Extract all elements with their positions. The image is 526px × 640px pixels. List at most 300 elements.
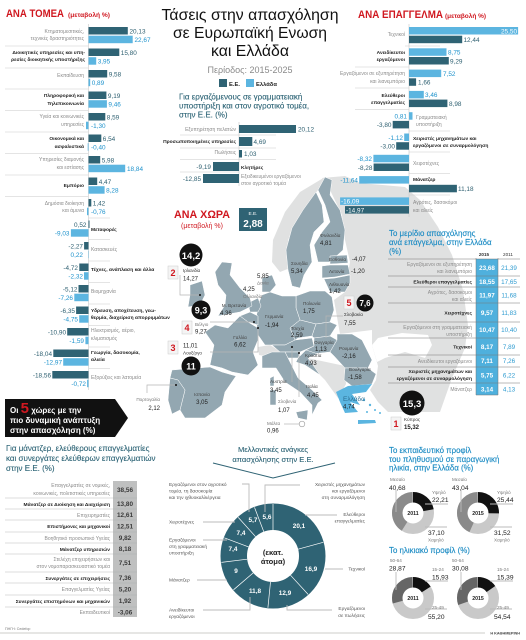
table values: 5,75 — [481, 372, 494, 380]
legend: Ελλάδα — [256, 82, 277, 88]
table values: 11,68 — [501, 292, 517, 300]
country labels: Πορτογαλία — [136, 397, 160, 402]
sector labels: και εστίασης — [57, 165, 85, 171]
country labels: 9,27 — [195, 330, 207, 336]
occupation values: -16,09 — [341, 199, 360, 206]
table values: 7,26 — [503, 358, 516, 365]
occupation labels: Ελεύθεροι — [382, 93, 406, 99]
heading: by occupation: ΑΝΑ ΕΠΑΓΓΕΛΜΑ — [358, 9, 443, 21]
sector values: 22,67 — [134, 37, 151, 44]
donut centre text — [261, 548, 286, 566]
sector labels: Οικονομικά και — [49, 136, 85, 142]
occupation labels: επαγγελματίες — [371, 100, 405, 106]
heading: by country: (μεταβολή %) — [181, 223, 223, 230]
age labels: 15,39 — [497, 574, 514, 582]
donut 2011 education — [397, 497, 429, 529]
heading: by country: ΑΝΑ ΧΩΡΑ — [174, 209, 230, 221]
country labels: Ελλάδα — [343, 395, 365, 403]
country labels: 15,32 — [404, 425, 420, 431]
country labels: 11,01 — [183, 344, 198, 350]
donut labels: Τεχνικοί — [348, 566, 366, 572]
labels: Επιχειρηματίες — [77, 513, 111, 519]
education labels: 40,68 — [389, 485, 406, 492]
country labels: Δανία — [257, 280, 269, 286]
country labels: Σουηδία — [291, 261, 308, 266]
donut 2015 age — [462, 582, 494, 614]
sector values: 4,47 — [99, 179, 112, 186]
bars — [180, 122, 296, 186]
education labels: 43,04 — [452, 485, 469, 492]
country labels: Βουλγαρία — [349, 367, 371, 372]
sector values: -18,56 — [33, 372, 51, 380]
Greece highlighted — [336, 384, 381, 424]
donut labels: Εργαζόμενοι στον αγροτικό — [169, 481, 227, 488]
heading: Το μερίδιο απασχόλησης — [389, 229, 476, 238]
values: 1,92 — [119, 598, 132, 605]
sector values — [33, 28, 151, 388]
gray column — [113, 481, 137, 617]
occupation values: -1,12 — [388, 135, 403, 142]
age labels: 2011 — [407, 596, 419, 602]
occupation labels: Εργαζόμενοι σε εξυπηρέτηση — [340, 70, 405, 77]
country labels: -4,07 — [352, 257, 366, 263]
country labels: Γαλλία — [233, 335, 247, 340]
values: -3,06 — [118, 610, 133, 616]
values and labels: Προσωποποιημένες υπηρεσίες — [163, 139, 236, 145]
country labels: Ιταλία — [306, 384, 318, 389]
sector labels: θερμία, διαχείριση απορριμμάτων — [91, 315, 170, 321]
donut labels: τομέα, τη δασοκομία — [169, 488, 213, 494]
age labels: 15-24 — [432, 567, 444, 572]
country labels: Λιθουανία — [329, 282, 350, 287]
country labels: Εσθονία — [329, 257, 346, 262]
sector values: 0,52 — [74, 222, 87, 229]
country labels: Κύπρος — [404, 416, 421, 422]
age labels: 25-49 — [497, 605, 509, 610]
occupation labels: Μάνατζερ — [413, 177, 435, 183]
values and labels: στον αγροτικό τομέα — [241, 180, 286, 187]
country labels: 1,13 — [315, 347, 327, 353]
table labels: Εργαζόμενοι στη γραμματειακή — [403, 324, 472, 331]
top-five circles: 15,3 — [403, 399, 421, 410]
country labels: Λετονία — [329, 269, 345, 274]
donut labels: στη γραμματειακή — [169, 543, 207, 550]
occupation labels: υποστήριξη — [416, 121, 442, 128]
table values: 10,40 — [501, 327, 517, 334]
heading: υποστήριξη και στον αγροτικό τομέα, — [179, 102, 309, 110]
rank badges — [168, 266, 401, 430]
sector values: 8,59 — [107, 114, 120, 122]
panel: age profile — [389, 546, 514, 621]
heading: ανά επάγγελμα, στην Ελλάδα — [389, 238, 492, 247]
sector values: 20,13 — [130, 28, 146, 36]
table values: 6,22 — [503, 372, 516, 380]
country labels: Μάλτα — [267, 420, 281, 426]
country labels: Λουξ/ργο — [183, 350, 202, 356]
sector labels: Υπηρεσίες διαμονής — [39, 156, 85, 163]
sector labels: Κτηματομεσιτικές, — [45, 28, 84, 35]
sector labels: Γεωργία, δασοκομία, — [91, 350, 140, 356]
sector labels: Τέχνες, ανάπλαση και άλλα — [91, 267, 154, 273]
occupation values: 12,44 — [464, 37, 480, 44]
table labels: Αγρότες, δασοκόμοι — [428, 289, 472, 296]
sector labels: Κατασκευές — [91, 246, 118, 253]
table labels: Εργαζόμενοι σε εξυπηρέτηση — [407, 261, 472, 268]
education labels: 31,52 — [494, 530, 511, 537]
year header: 2011 — [503, 252, 513, 257]
sector values: -18,04 — [34, 351, 52, 358]
age labels: 50-64 — [390, 558, 402, 563]
country labels: Μ. Βρετανία — [222, 303, 247, 308]
donut labels: Εργαζόμενοι — [169, 536, 196, 544]
sector labels: Εμπόριο — [64, 183, 84, 189]
heading: του πληθυσμού σε παραγωγική — [389, 455, 499, 464]
heading: by sector: ΑΝΑ ΤΟΜΕΑ — [6, 8, 64, 20]
sector values: -0,72 — [71, 381, 86, 388]
top-five circles: 11 — [186, 362, 196, 372]
occupation labels: Χειριστές μηχανημάτων και — [413, 136, 477, 142]
country labels: Γερμανία — [265, 314, 284, 319]
education labels — [389, 477, 514, 542]
table values — [479, 265, 517, 394]
occupation values: 11,18 — [458, 186, 474, 193]
labels: Μάνατζερ σε Διοίκηση και Διαχείριση — [24, 502, 110, 508]
heading note: (μεταβολή %) — [68, 12, 110, 19]
occupation values — [340, 28, 517, 214]
donut chart — [221, 504, 323, 608]
country labels — [136, 233, 421, 434]
labels — [16, 482, 111, 616]
labels: κοινωνικές, πολιτιστικές υπηρεσίες — [33, 490, 111, 497]
donut chart: 7,4 — [229, 546, 238, 553]
sector labels: τεχνικές δραστηριότητες — [31, 35, 85, 42]
table values: 17,65 — [501, 279, 517, 286]
sector labels: υπηρεσίες — [61, 122, 85, 128]
rank badges: 3 — [170, 343, 176, 353]
map of Europe — [168, 176, 468, 424]
sector values: -0,40 — [91, 145, 106, 152]
country labels: 1,42 — [329, 289, 341, 295]
occupation values: 8,75 — [448, 50, 461, 57]
country labels: -2,16 — [342, 354, 356, 360]
footer: ΠΗΓΗ: Cedefop — [5, 627, 30, 631]
occupation values: 8,98 — [449, 101, 462, 108]
country labels: 14,27 — [183, 276, 199, 282]
occupation values: -3,80 — [377, 122, 392, 129]
sector values: -9,03 — [55, 231, 70, 238]
table labels: υποστήριξη — [446, 331, 472, 338]
values: 5,20 — [119, 586, 132, 594]
sector values: 8,28 — [106, 188, 119, 195]
sector labels: Εκπαίδευση — [57, 73, 84, 79]
rank badges: 1 — [393, 419, 399, 429]
country labels: -1,58 — [348, 375, 362, 381]
donut chart: 5,6 — [263, 514, 272, 521]
sector labels: και άμυνα — [62, 207, 84, 214]
title: Τάσεις στην απασχόληση — [162, 7, 338, 24]
education labels: 37,10 — [428, 530, 445, 537]
country labels: 4,74 — [343, 404, 355, 410]
values: 38,56 — [117, 487, 133, 494]
country labels: Πολωνία — [303, 301, 321, 306]
donut labels — [169, 481, 366, 620]
sector labels: Εξορύξεις και λατομεία — [91, 374, 141, 381]
country labels: Κροατία — [305, 353, 322, 358]
table values: 9,57 — [481, 310, 494, 317]
donut labels: εργαζόμενοι — [169, 613, 195, 620]
sector values: -4,75 — [63, 317, 78, 324]
panel: clerical and agricultural workers — [163, 92, 314, 187]
sector values: 15,80 — [121, 50, 137, 57]
country labels: Σλοβενία — [278, 399, 297, 404]
occupation values: 1,66 — [418, 80, 431, 87]
donut labels: στη συναρμολόγηση — [322, 494, 365, 501]
heading: και συνεργάτες ελεύθερων επαγγελματιών — [6, 454, 156, 463]
values and labels: Εξυπηρέτηση πελατών — [185, 126, 236, 133]
donut labels: Χειριστές μηχανημάτων — [315, 481, 366, 488]
labels: Συνεργάτες επιστημόνων και μηχανικών — [16, 599, 110, 605]
education labels: Μεσαίο — [452, 477, 467, 482]
donut chart: 12,9 — [279, 590, 292, 597]
age labels: 15-24 — [497, 567, 509, 572]
sector values: -5,12 — [63, 286, 78, 294]
heading note: (μεταβολή %) — [445, 13, 486, 20]
legend — [219, 79, 277, 88]
values: 12,61 — [117, 512, 133, 519]
panel: future employment needs donut — [169, 445, 366, 620]
table values: 7,89 — [503, 344, 516, 351]
sector values: 6,54 — [103, 136, 116, 143]
non-EU land — [258, 176, 468, 412]
country labels: Φινλανδία — [320, 233, 341, 238]
country labels: 6,62 — [234, 342, 246, 348]
sector values: 9,19 — [108, 93, 121, 100]
heading: στην Ε.Ε. (%) — [6, 464, 55, 473]
top-five circles: 7,6 — [359, 299, 371, 308]
sector labels: Διοικητικές υπηρεσίες και υπη- — [12, 50, 85, 56]
callout: top five countries: πιο δυναμική ανάπτυξη — [10, 416, 100, 425]
occupation values: -14,97 — [346, 207, 365, 214]
donut chart: 9 — [234, 568, 238, 575]
education labels: 2015 — [472, 511, 484, 517]
sector labels: Υγεία και κοινωνικές — [39, 113, 85, 120]
occupation values: -8,32 — [357, 156, 372, 163]
labels: στον νομοπαρασκευαστικό τομέα — [37, 563, 110, 570]
country labels: 5,34 — [291, 269, 303, 275]
donut chart: 16,9 — [305, 566, 318, 573]
panel: managers and professionals table — [5, 444, 156, 617]
donut labels: και εργαζόμενοι — [332, 488, 365, 494]
country labels: 2,12 — [148, 406, 161, 412]
donut labels: Ελεύθεροι — [343, 511, 365, 518]
labels: Βοηθητικό προσωπικό Υγείας — [45, 535, 111, 542]
donut leaders — [197, 484, 343, 610]
panel: by sector — [5, 8, 170, 390]
sector labels: Πληροφορική και — [44, 93, 85, 99]
education labels: Μεσαίο — [390, 477, 405, 482]
labels: Επαγγελματίες σε νομικές, — [51, 482, 110, 489]
donut labels: υποστήριξη — [169, 550, 194, 556]
sector values: -2,27 — [68, 244, 83, 250]
table labels: Τεχνικοί — [453, 344, 473, 350]
panel: share by occupation table — [388, 229, 520, 395]
sector bars — [52, 27, 133, 387]
table values: 10,47 — [479, 327, 495, 334]
top-five circles: 14,2 — [182, 251, 200, 262]
sector labels: αλιεία — [91, 357, 105, 363]
occupation labels: Αγρότες, δασοκόμοι — [413, 199, 457, 206]
country labels: 3,45 — [270, 388, 282, 394]
occupation labels: Ανειδίκευτοι — [377, 50, 406, 56]
table labels: εργαζόμενοι σε συναρμολόγηση — [397, 376, 472, 382]
donut labels: Εργαζόμενοι — [338, 605, 365, 612]
education labels: 25,44 — [497, 497, 514, 504]
table labels: και λιανεμπόριο — [437, 268, 472, 275]
table values: 3,14 — [481, 386, 494, 394]
donut chart: 20,1 — [293, 523, 306, 530]
donut 2015 education — [462, 497, 494, 529]
Malta marker — [299, 421, 305, 427]
period subtitle: Περίοδος: 2015-2025 — [208, 65, 292, 75]
education labels: Υψηλό — [497, 489, 511, 495]
heading: απασχόλησης στην Ε.Ε. — [232, 455, 314, 464]
occupation labels: εργαζόμενοι σε συναρμολόγηση — [413, 143, 488, 149]
values: 7,51 — [119, 560, 132, 567]
top-five circles: 9,3 — [195, 306, 207, 316]
age labels: 54,54 — [494, 614, 511, 621]
labels: Εκπαιδευτικοί — [80, 610, 111, 616]
values and labels: Κλητήρες — [241, 165, 264, 171]
heading: Μελλοντικές ανάγκες — [238, 445, 308, 454]
donut labels: και την ιχθυοκαλλιέργεια — [169, 494, 221, 501]
donut chart: 7,4 — [237, 530, 246, 537]
occupation values: 3,46 — [425, 92, 438, 99]
year header: 2015 — [479, 252, 490, 257]
donut centre text: (εκατ. — [263, 548, 283, 557]
age labels: 50-64 — [452, 558, 464, 563]
donut 2011 age — [397, 582, 429, 614]
EU total box — [239, 208, 267, 231]
education labels: 22,21 — [432, 497, 449, 504]
occupation values: -8,28 — [358, 165, 373, 172]
country labels: 7,55 — [344, 321, 356, 327]
country labels: Ισπανία — [194, 392, 210, 397]
heading: στην Ε.Ε. (%) — [179, 110, 228, 120]
age labels: 25-49 — [432, 605, 444, 610]
education labels: Υψηλό — [432, 489, 446, 495]
donut labels: Χειροτέχνες — [169, 518, 195, 526]
sector values: 3,95 — [98, 59, 111, 66]
chevron — [213, 463, 335, 478]
values and labels: Εξειδικευμένοι εργαζόμενοι — [241, 173, 301, 180]
country labels: Τσεχία — [291, 326, 305, 331]
country labels: Ρουμανία — [339, 346, 359, 351]
occupation bars — [340, 27, 518, 214]
title: και Ελλάδα — [211, 43, 289, 60]
donut labels: Ανειδίκευτοι — [169, 608, 194, 614]
heading: by country — [174, 209, 230, 230]
leader lines — [396, 490, 513, 527]
values and labels: 20,12 — [298, 126, 314, 134]
values and labels: -12,85 — [183, 176, 201, 183]
sector labels: Δημόσια διοίκηση — [45, 200, 84, 207]
education labels: Χαμηλό — [494, 536, 510, 542]
table labels: Χειροτέχνες — [444, 310, 472, 316]
sector values: 0,22 — [71, 252, 83, 259]
education labels: Χαμηλό — [428, 536, 444, 542]
country labels: -1,20 — [351, 269, 365, 275]
footer: Η ΚΑΘΗΜΕΡΙΝΗ — [490, 632, 520, 636]
sector labels: κλιματισμός — [91, 335, 118, 342]
country labels: 4,93 — [305, 361, 317, 367]
sector values: 9,58 — [109, 72, 122, 78]
occupation values: -3,00 — [380, 144, 395, 150]
values — [117, 487, 133, 616]
country labels: Ολλανδία — [243, 294, 263, 299]
labels: Συνεργάτες σε επιχειρήσεις — [45, 576, 110, 582]
values and labels: -9,19 — [196, 164, 211, 171]
age labels: 2015 — [472, 596, 484, 602]
occupation values: 7,52 — [443, 71, 456, 78]
table labels — [397, 261, 473, 393]
rank badges: 4 — [184, 323, 190, 333]
table labels: Ανειδίκευτοι εργαζόμενοι — [418, 358, 472, 365]
panel: by occupation — [340, 9, 518, 217]
labels: Στελέχη επιχειρήσεων και — [53, 556, 110, 563]
values and labels: 4,69 — [254, 139, 266, 146]
sector values: -2,32 — [68, 274, 83, 281]
EU countries — [168, 177, 376, 420]
sector values: 0,89 — [92, 80, 105, 87]
sector labels: ασφαλιστικά — [55, 144, 84, 150]
callout: top five countries: Οι 5 χώρες με την — [10, 400, 82, 417]
country labels: Αυστρία — [270, 379, 287, 384]
age labels: 30,08 — [452, 566, 469, 572]
labels: Επαγγελματίες Υγείας — [62, 587, 111, 593]
donut labels: Μάνατζερ — [169, 576, 190, 584]
sector values: -10,90 — [48, 330, 66, 336]
table labels: Μάνατζερ — [450, 386, 472, 393]
occupation labels: και λιανεμπόριο — [370, 78, 405, 85]
labels: Μάνατζερ υπηρεσιών — [60, 547, 110, 553]
panel: education profile — [389, 446, 514, 542]
table values: 11,97 — [479, 292, 495, 300]
sector values: 18,84 — [127, 166, 143, 173]
rank badges: 2 — [170, 268, 176, 278]
country labels: Ιρλανδία — [183, 268, 201, 273]
occupation axis and separators — [355, 24, 450, 217]
values: 13,80 — [117, 501, 133, 508]
country labels: 1,07 — [278, 408, 290, 414]
table labels: Ελεύθεροι επαγγελματίες — [413, 280, 472, 286]
country labels: 2,59 — [291, 333, 303, 339]
heading: Για εργαζόμενους σε γραμματειακή — [179, 92, 302, 102]
table values: 4,13 — [503, 386, 516, 394]
top-five circles — [180, 244, 424, 416]
occupation values: 0,81 — [395, 114, 407, 120]
occupation values: -11,64 — [340, 177, 358, 184]
blue column — [476, 259, 498, 395]
values: 8,18 — [119, 546, 132, 553]
donut chart: 11,8 — [249, 588, 261, 595]
occupation labels: Γραμματειακή — [416, 114, 447, 121]
leader lines — [147, 275, 343, 424]
country labels: Ουγγαρία — [314, 340, 334, 345]
footer — [0, 627, 520, 636]
country labels: 3,05 — [196, 400, 208, 406]
sector values: -6,35 — [60, 308, 75, 315]
sector axis and separators — [5, 24, 110, 390]
